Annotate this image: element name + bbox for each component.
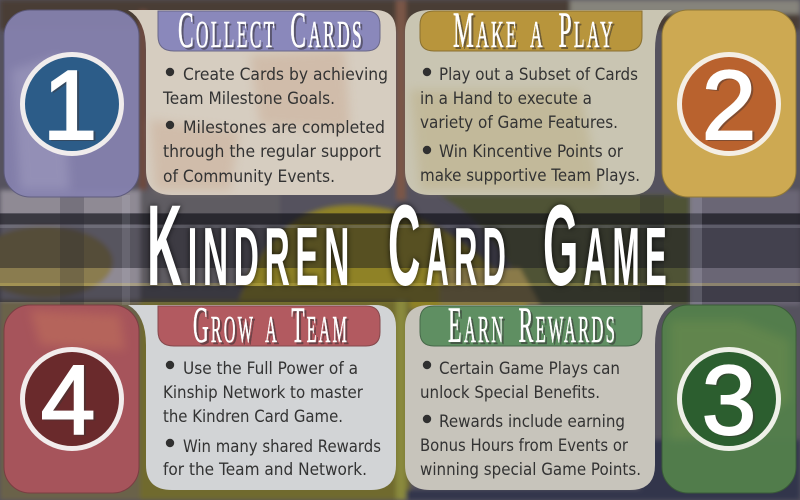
- text panel background: step 4: [128, 305, 396, 490]
- text panel background: step 3: [405, 305, 672, 490]
- number badge: 1: [22, 50, 122, 160]
- main title: KINDREN: [147, 182, 355, 310]
- panel tint variation: step 1: [150, 50, 350, 190]
- bullet list: step 1: [162, 65, 388, 186]
- tile: step 1: [4, 10, 139, 197]
- bullet list: step 4: [163, 359, 381, 479]
- bullet list: step 3: [420, 359, 641, 479]
- number badge: 3: 3: [702, 345, 756, 455]
- bullet list: step 2: Play out a Subset of Cards: [439, 65, 638, 84]
- number badge: 2: [680, 50, 778, 160]
- heading: grow a team: GROW A TEAM: [193, 298, 349, 354]
- number badge: 4: 4: [41, 345, 95, 455]
- bullet list: step 3: winning special Game Points.: [420, 460, 641, 479]
- bullet list: step 3: Bonus Hours from Events or: [420, 436, 628, 455]
- bullet list: step 2: make supportive Team Plays.: [420, 166, 640, 185]
- bullet list: step 3: Rewards include earning: [439, 412, 625, 431]
- panel: step 2 make a play: [405, 3, 796, 197]
- heading: earn rewards: EARN REWARDS: [448, 298, 617, 354]
- tile tint variation: step 4: [30, 310, 125, 350]
- tile tint variation: step 3: [670, 320, 790, 440]
- number badge: 3: [680, 345, 778, 455]
- bullet list: step 1: Team Milestone Goals.: [162, 89, 335, 108]
- text panel background: step 1: [128, 10, 396, 195]
- tile: step 2: [662, 10, 796, 197]
- header banner: step 4: [158, 306, 380, 346]
- bullet list: step 1: through the regular support: [163, 142, 381, 161]
- header banner: step 3: [420, 306, 642, 346]
- heading: make a play: MAKE A PLAY: [453, 3, 615, 59]
- bullet list: step 4: for the Team and Network.: [163, 460, 367, 479]
- panel: step 1 collect cards: [4, 3, 396, 197]
- bullet list: step 1: of Community Events.: [163, 167, 335, 186]
- tile tint variation: step 1: [12, 55, 70, 190]
- panel: step 3 earn rewards: [405, 298, 796, 493]
- text panel background: step 2: [405, 10, 672, 195]
- main title: GAME: [543, 182, 672, 310]
- tile: step 4: [4, 305, 139, 493]
- bullet list: step 4: Win many shared Rewards: [183, 437, 381, 456]
- panel: step 4 grow a team: [4, 298, 396, 493]
- heading: collect cards: COLLECT CARDS: [178, 3, 364, 59]
- header banner: step 2: [420, 11, 642, 51]
- header banner: step 1: [158, 11, 380, 51]
- panel tint variation: step 2: [410, 90, 600, 190]
- number badge: 1: 1: [43, 50, 97, 160]
- number badge: 2: 2: [702, 50, 756, 160]
- bullet list: step 4: the Kindren Card Game.: [163, 407, 343, 426]
- bullet list: step 2: Win Kincentive Points or: [439, 142, 623, 161]
- main title: CARD: [388, 182, 511, 310]
- bullet list: step 1: Milestones are completed: [183, 118, 385, 137]
- bullet list: step 3: unlock Special Benefits.: [420, 383, 600, 402]
- bullet list: step 1: Create Cards by achieving: [183, 65, 388, 84]
- bullet list: step 2: [420, 65, 640, 185]
- bullet list: step 2: variety of Game Features.: [420, 113, 618, 132]
- tile: step 3: [662, 305, 796, 493]
- bullet list: step 4: Kinship Network to master: [163, 383, 363, 402]
- bullet list: step 4: Use the Full Power of a: [183, 359, 358, 378]
- bullet list: step 2: in a Hand to execute a: [420, 89, 592, 108]
- bullet list: step 3: Certain Game Plays can: [439, 359, 620, 378]
- number badge: 4: [22, 345, 122, 455]
